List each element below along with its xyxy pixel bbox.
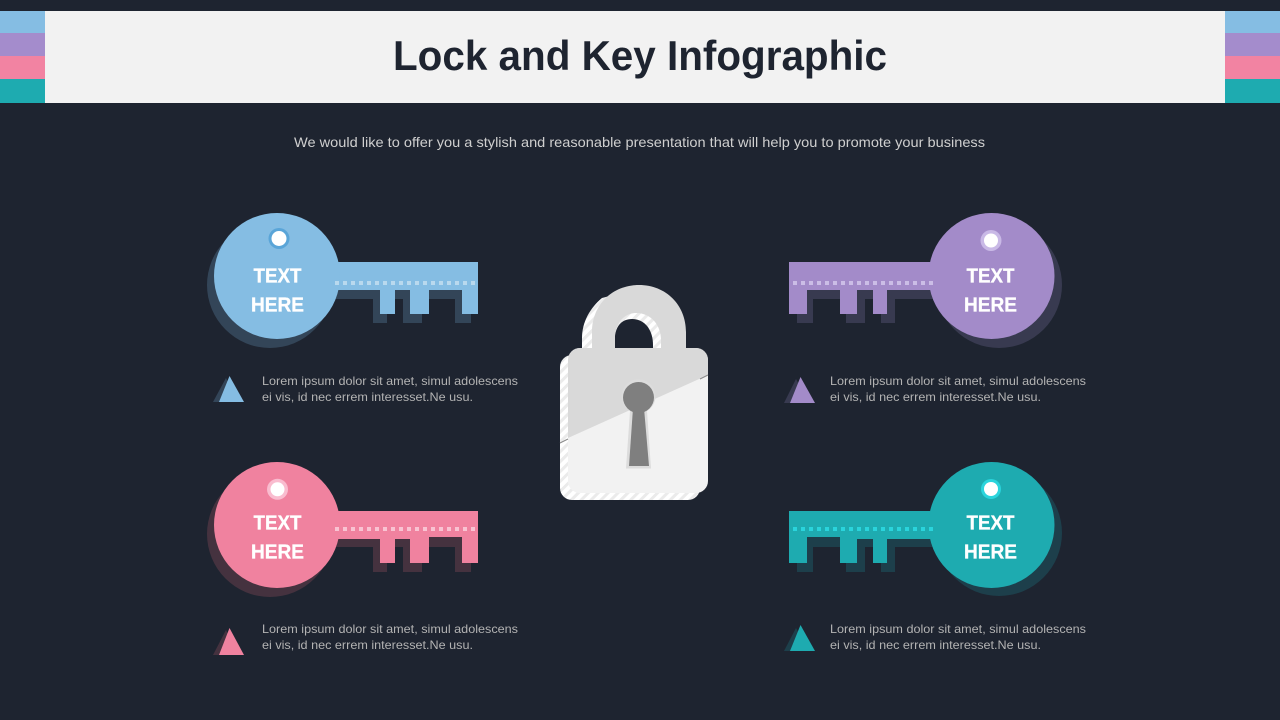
key hole — [268, 228, 290, 249]
key shadow — [207, 222, 471, 348]
note text: Lorem ipsum dolor sit amet, simul adolescens — [830, 622, 1086, 636]
key hole — [267, 479, 288, 500]
key head — [214, 213, 340, 339]
key label: TEXT — [966, 512, 1014, 534]
note text: Lorem ipsum dolor sit amet, simul adolescens — [830, 374, 1086, 388]
key label: TEXT — [254, 512, 302, 534]
triangle icon — [784, 377, 815, 403]
shackle front — [592, 285, 686, 360]
right colour stripes — [1225, 11, 1280, 103]
key label: HERE — [964, 542, 1017, 564]
key shadow — [207, 471, 471, 597]
title: Lock and Key Infographic — [393, 32, 887, 79]
key head — [928, 213, 1054, 339]
keyhole — [622, 379, 656, 468]
note text: Lorem ipsum dolor sit amet, simul adolescens — [262, 622, 518, 636]
key: blue, top left — [207, 213, 478, 348]
title banner — [45, 11, 1225, 103]
lock body back — [560, 355, 700, 500]
note: purple — [784, 374, 1086, 404]
key hole — [980, 230, 1002, 251]
note text: ei vis, id nec errem interesset.Ne usu. — [262, 390, 473, 404]
key blade — [335, 511, 478, 563]
key label: HERE — [251, 294, 304, 316]
hairline left — [560, 439, 568, 443]
note text: ei vis, id nec errem interesset.Ne usu. — [830, 390, 1041, 404]
lock body shaded half — [568, 348, 708, 438]
note text: ei vis, id nec errem interesset.Ne usu. — [830, 638, 1041, 652]
padlock — [560, 285, 708, 500]
note: blue — [213, 374, 518, 404]
key head — [214, 462, 340, 588]
key: pink, bottom left — [207, 462, 478, 597]
triangle icon — [213, 628, 244, 655]
key blade — [789, 511, 935, 563]
dotted line — [335, 281, 476, 285]
key label: TEXT — [966, 266, 1014, 288]
key blade — [335, 262, 478, 314]
left colour stripes — [0, 11, 45, 103]
key: purple, top right — [789, 213, 1062, 348]
note text: Lorem ipsum dolor sit amet, simul adolescens — [262, 374, 518, 388]
dotted line — [793, 527, 933, 531]
note: teal — [784, 622, 1086, 652]
shackle back — [582, 288, 664, 360]
subtitle: We would like to offer you a stylish and reasonable presentation that will help you to promote your business — [294, 134, 985, 150]
shackle opening — [615, 319, 653, 349]
dotted line — [335, 527, 476, 531]
key shadow — [797, 470, 1062, 596]
key: teal, bottom right — [789, 462, 1062, 596]
triangle icon — [784, 625, 815, 651]
triangle icon — [213, 376, 244, 402]
lock body front — [568, 348, 708, 493]
hairline right — [700, 375, 708, 379]
key label: TEXT — [254, 266, 302, 288]
key shadow — [797, 222, 1062, 348]
key hole — [981, 479, 1001, 499]
key label: HERE — [964, 294, 1017, 316]
key blade — [789, 262, 935, 314]
key label: HERE — [251, 542, 304, 564]
key head — [928, 462, 1054, 588]
dotted line — [793, 281, 933, 285]
note: pink — [213, 622, 518, 655]
note text: ei vis, id nec errem interesset.Ne usu. — [262, 638, 473, 652]
